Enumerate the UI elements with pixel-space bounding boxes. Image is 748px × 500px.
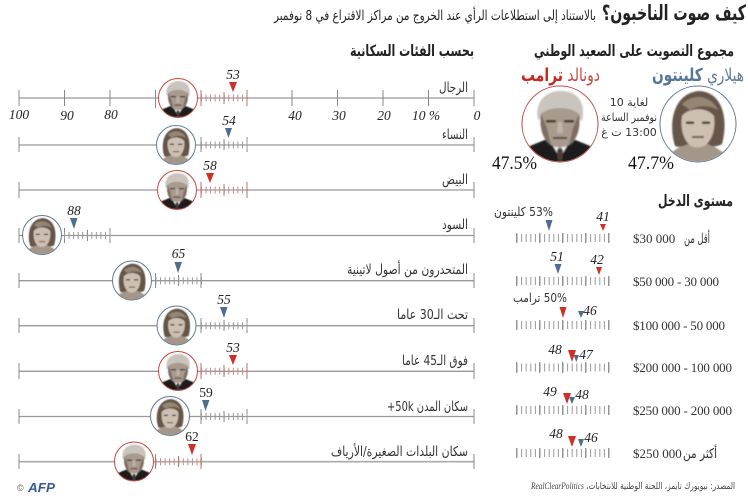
income row: 50000 to 100000: 46 xyxy=(583,303,597,318)
income row: under 30000: أقل من xyxy=(684,229,710,247)
row: men: الرجال xyxy=(439,80,468,96)
income row: 200000 to 250000: 48 xyxy=(575,387,589,402)
row: city residents: 59 xyxy=(199,385,213,400)
row: men xyxy=(19,67,474,118)
timestamp note: نوفمبر الساعة xyxy=(601,111,657,124)
portrait: Clinton xyxy=(660,86,736,162)
row: under 30 xyxy=(19,292,474,345)
axis scale labels: 10 % xyxy=(412,108,440,123)
income row: over 250000: أكثر من xyxy=(683,444,717,462)
income row: 30000 to 50000: $50 000 - 30 000 xyxy=(633,274,719,289)
row: under 30: تحت الـ30 عاما xyxy=(397,307,468,323)
axis scale labels: 80 xyxy=(104,107,118,122)
candidate name: Trump: دونالد ترامب xyxy=(521,65,600,86)
AFP logo xyxy=(17,481,56,495)
row: under 30: 55 xyxy=(217,292,231,307)
subtitle: بالاستناد إلى استطلاعات الرأي عند الخروج من مراكز الاقتراع في 8 نوفمبر xyxy=(273,6,596,24)
row: blacks: السود xyxy=(442,217,468,233)
Trump share: 47.5% xyxy=(492,153,537,174)
row: over 45: فوق الـ45 عاما xyxy=(402,353,468,369)
row: women xyxy=(19,113,474,164)
income row: 200000 to 250000: 49 xyxy=(543,384,557,399)
AFP logo: © xyxy=(17,483,24,493)
row: men: 53 xyxy=(226,67,240,82)
income row: 50000 to 100000 xyxy=(513,290,725,333)
income row: 50000 to 100000: 50% ترامب xyxy=(513,290,567,306)
row: blacks: 88 xyxy=(67,203,81,218)
row: small towns and rural: سكان البلدات الصغيرة/الأرياف xyxy=(331,443,468,460)
axis scale labels: 0 xyxy=(474,108,481,123)
row: latinos: 65 xyxy=(172,246,186,261)
income row: over 250000: 48 xyxy=(549,426,563,441)
row: whites: 58 xyxy=(203,158,217,173)
row: whites: البيض xyxy=(442,172,468,188)
row: latinos: المتحدرون من أصول لاتينية xyxy=(347,260,468,278)
income row: over 250000: 46 xyxy=(584,430,598,445)
portrait: Trump xyxy=(520,86,600,162)
row: women: 54 xyxy=(222,113,236,128)
income row: 200000 to 250000: $250 000 - 200 000 xyxy=(633,403,732,418)
income row: over 250000: $250 000 xyxy=(633,446,682,461)
timestamp note xyxy=(601,96,657,139)
income row: 30000 to 50000 xyxy=(516,249,719,289)
income row: under 30000 xyxy=(494,204,710,247)
timestamp note: 13:00 ت غ xyxy=(601,126,657,139)
row: over 45: 53 xyxy=(226,340,240,355)
axis scale labels xyxy=(9,107,481,123)
axis scale labels: 30 xyxy=(331,108,346,123)
row: blacks xyxy=(19,203,474,254)
Clinton share: 47.7% xyxy=(628,153,674,174)
row: city residents: سكان المدن 50k+ xyxy=(387,399,468,415)
income row: 100000 to 200000: 47 xyxy=(579,347,594,362)
row: over 45 xyxy=(19,340,474,390)
income row: 50000 to 100000: $100 000 - 50 000 xyxy=(633,318,725,333)
axis scale labels: 100 xyxy=(9,107,29,122)
income row: under 30000: 41 xyxy=(596,209,610,224)
axis scale labels: 40 xyxy=(288,108,302,123)
timestamp note: لغاية 10 xyxy=(610,96,648,109)
income row: 100000 to 200000: $200 000 - 100 000 xyxy=(633,360,732,375)
income row: 100000 to 200000: 48 xyxy=(548,342,562,357)
income row: 100000 to 200000 xyxy=(516,342,732,375)
row: small towns and rural: 62 xyxy=(185,429,199,444)
row: women: النساء xyxy=(442,127,468,143)
row: city residents xyxy=(19,385,474,436)
income row: under 30000: 53% كلينتون xyxy=(494,204,553,220)
AFP logo: AFP xyxy=(27,481,56,495)
income row: under 30000: $30 000 xyxy=(633,231,675,246)
income row: 30000 to 50000: 51 xyxy=(550,249,564,264)
panel: national vote xyxy=(492,65,744,174)
income row: 200000 to 250000 xyxy=(516,384,732,418)
axis scale labels: 90 xyxy=(60,108,74,123)
income row: over 250000 xyxy=(516,426,717,462)
row: small towns and rural xyxy=(19,429,474,481)
heading: by demographic groups: بحسب الفئات السكانية xyxy=(350,42,474,60)
income row: 30000 to 50000: 42 xyxy=(590,252,604,267)
row: latinos xyxy=(19,246,474,300)
axis scale labels: 20 xyxy=(377,108,391,123)
row: whites xyxy=(19,158,474,210)
